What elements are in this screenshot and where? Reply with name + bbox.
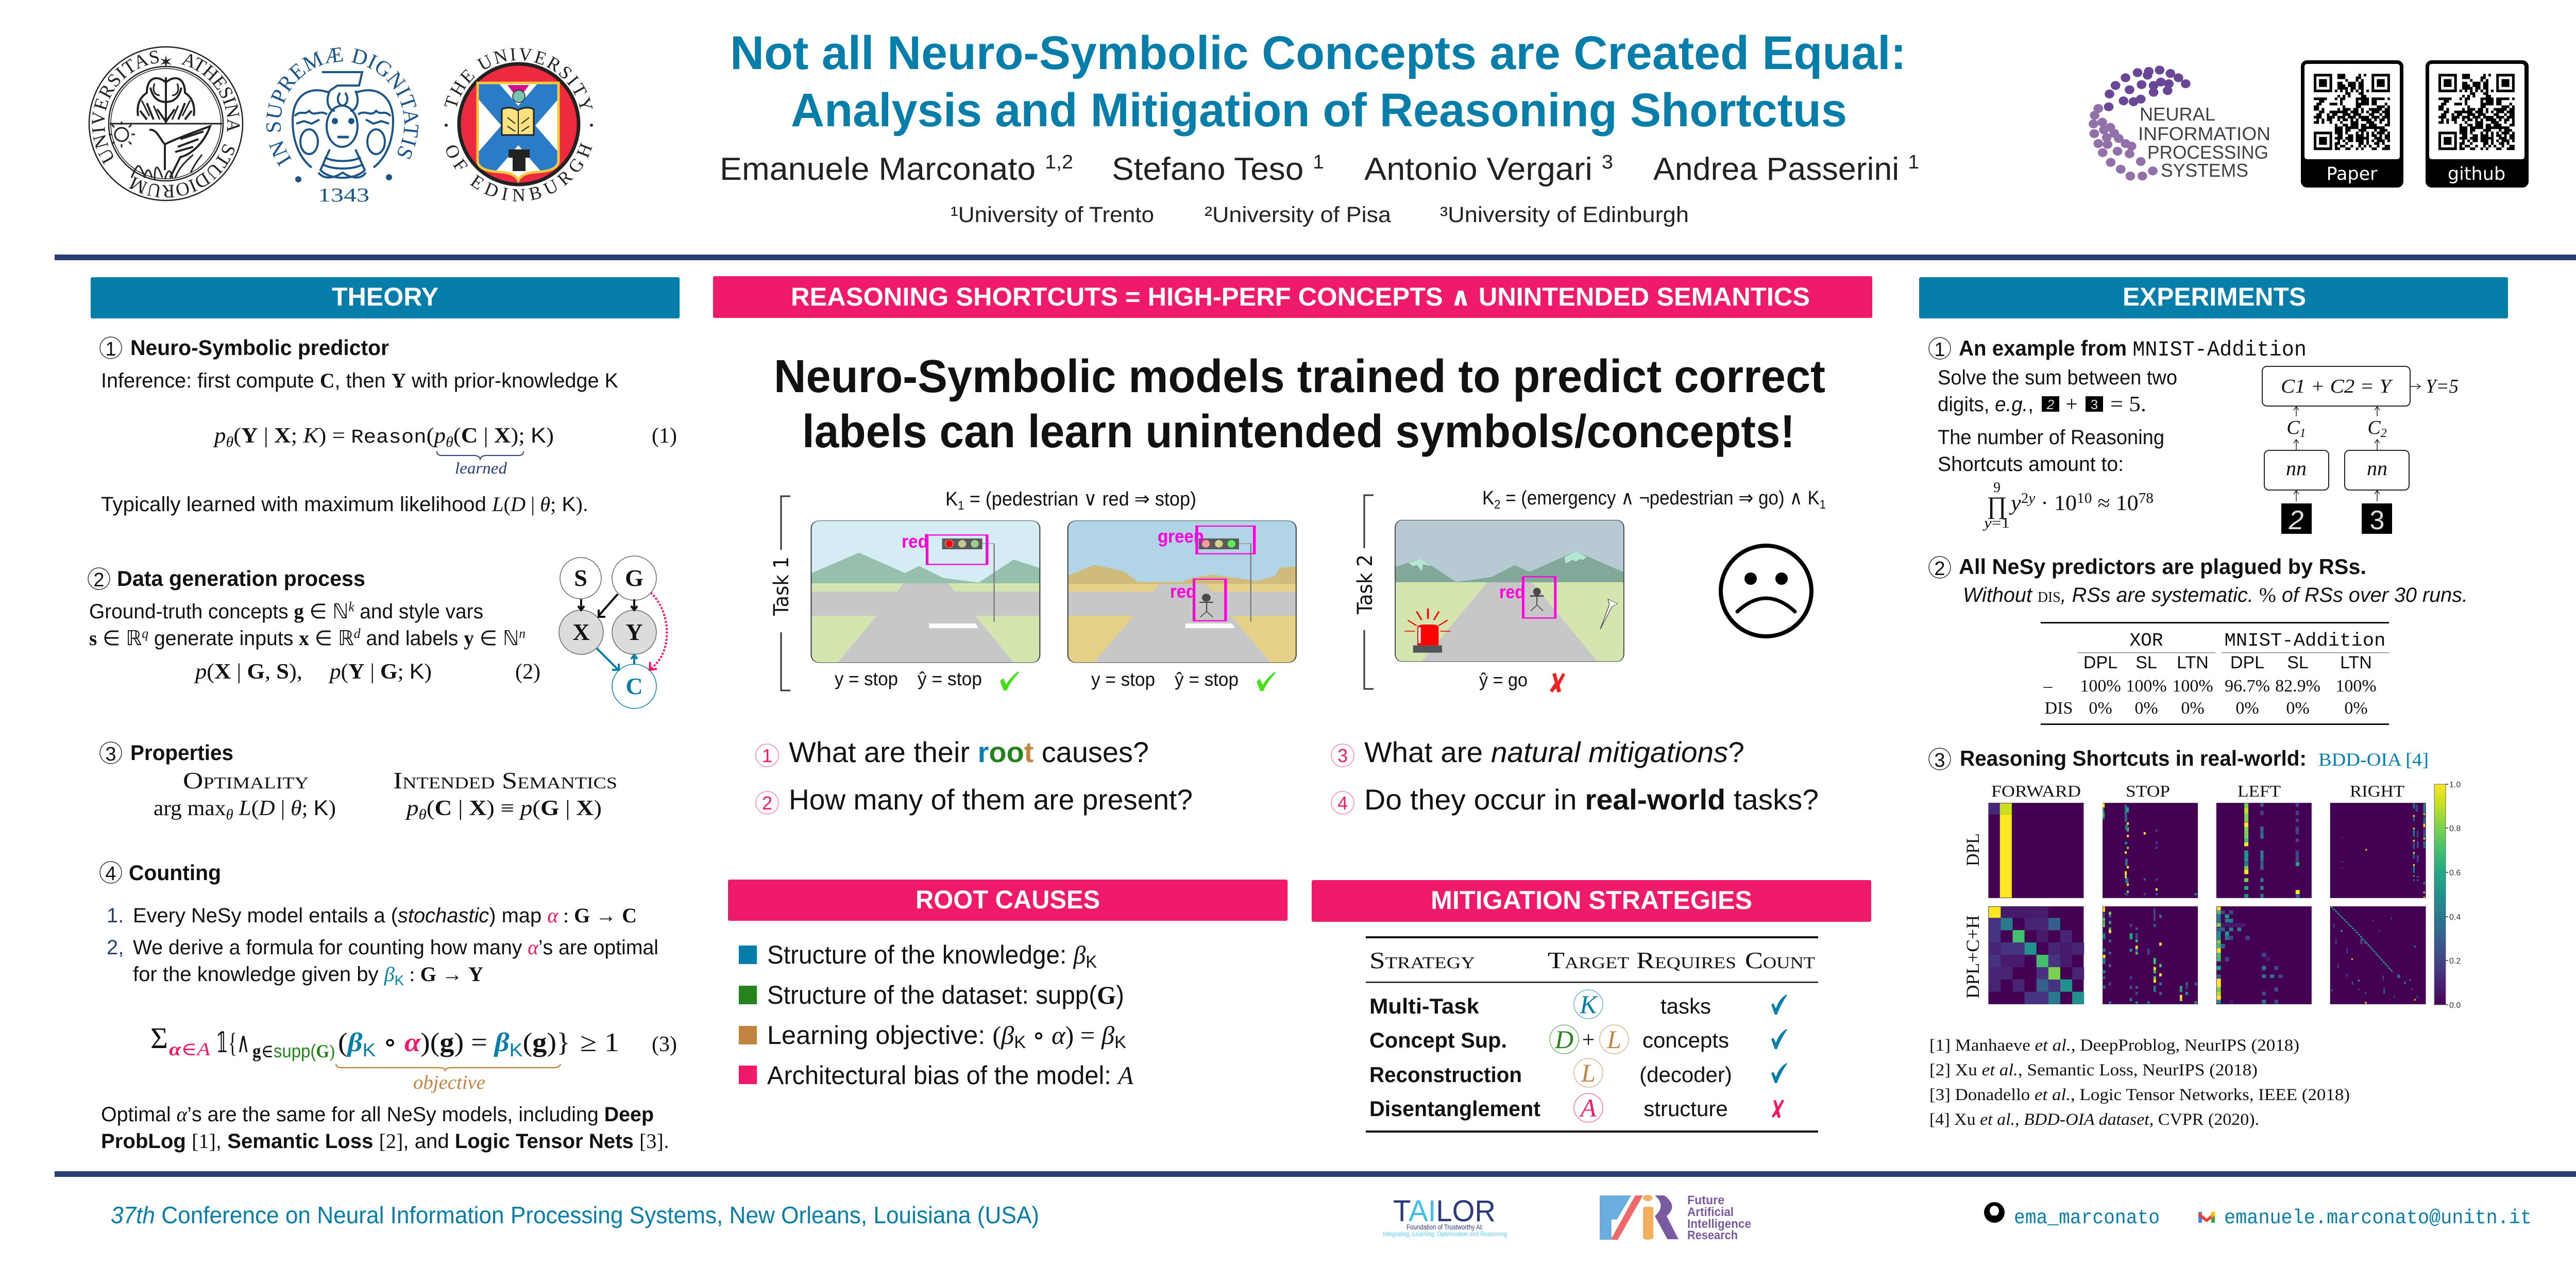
heading: experiments (1919, 277, 2508, 318)
item 3: properties: ( (427, 797, 435, 820)
icon: sad face (1721, 546, 1811, 636)
colorbar: 0.4 (2449, 913, 2461, 922)
logo: NeurIPS: NEURAL (2140, 104, 2215, 125)
item 2: data generation process: (2) (515, 660, 540, 684)
item 2: data generation process: k (348, 599, 354, 614)
table: strategies (1366, 936, 1818, 1133)
item 1: neuro-symbolic predictor: p (213, 424, 226, 448)
cause: objective (739, 1021, 1126, 1052)
table: strategies: K (1579, 990, 1598, 1019)
chart: heatmaps BDD-OIA: LEFT (2238, 782, 2281, 800)
item 1: MNIST example: 9 (1993, 480, 2001, 496)
table: RS percentages: 100% (2126, 677, 2167, 696)
item 3: properties: arg max (154, 797, 224, 820)
item 1: neuro-symbolic predictor: 1 (105, 339, 116, 360)
table: RS percentages: 96.7% (2225, 677, 2270, 696)
question 1: 1 (762, 745, 772, 766)
item 1: neuro-symbolic predictor: (1) (652, 424, 677, 448)
heatmap: DPL left (2216, 803, 2312, 898)
logo: NeurIPS (2089, 65, 2270, 181)
chart: heatmaps BDD-OIA: DPL (1962, 833, 1983, 866)
panel: mitigation strategies (1312, 880, 1871, 1133)
predictions task 1 (835, 668, 1276, 691)
heading: experiments: EXPERIMENTS (2123, 282, 2306, 311)
equation 3: ( (523, 1028, 532, 1057)
equation 3: α∈A (169, 1039, 211, 1059)
table: strategies: Multi-Task (1369, 994, 1480, 1018)
table: strategies: Reconstruction (1369, 1062, 1522, 1087)
logo: TAILOR (1383, 1194, 1507, 1238)
chart: MNIST-addition architecture: nn (2367, 457, 2387, 480)
colorbar: 0.0 (2449, 1001, 2461, 1010)
logo: University of Trento: STUDIORUM (129, 144, 235, 198)
logo: University of Edinburgh: OF EDINBURGH (446, 142, 592, 201)
item 4: counting: K (395, 972, 404, 988)
title: Analysis and Mitigation of Reasoning Shortctus (791, 84, 1847, 137)
heatmap: DPL stop (2103, 803, 2198, 898)
table: strategies: Target (1548, 947, 1630, 973)
heading: reasoning shortcuts (713, 276, 1872, 318)
cause: objective: α) = β (1052, 1021, 1114, 1050)
item 1: MNIST example: y (2009, 492, 2021, 515)
item 2: all NeSy predictors: 2 (1934, 558, 1945, 580)
item 1: neuro-symbolic predictor: θ (446, 434, 453, 450)
item 2: data generation process: Data generation process (117, 566, 365, 591)
logo: University of Edinburgh (444, 48, 593, 201)
logo: University of Trento: UNIVERSITAS (92, 50, 159, 165)
authors: 1 (1313, 151, 1324, 173)
knowledge K1: = (pedestrian ∨ red ⇒ stop) (964, 488, 1196, 510)
table: strategies: Requires (1636, 947, 1736, 973)
title: Not all Neuro-Symbolic Concepts are Created Equal: (730, 27, 1906, 79)
item 2: all NeSy predictors (1929, 554, 2468, 606)
table: RS percentages: 82.9% (2275, 677, 2320, 696)
item 2: all NeSy predictors: All NeSy predictors are plagued by RSs. (1959, 554, 2366, 579)
equation 3: (3) (652, 1033, 677, 1056)
cause: objective: Learning objective: (β (767, 1021, 1014, 1050)
QR code: Paper: Paper (2326, 164, 2378, 184)
authors: Antonio Vergari (1364, 151, 1583, 187)
chart: heatmaps BDD-OIA: RIGHT (2350, 782, 2404, 800)
item 2: data generation process: q (142, 626, 148, 641)
item 3: properties: Intended Semantics (393, 767, 617, 794)
table: RS percentages: DIS (2045, 699, 2073, 718)
references: [4] Xu et al., BDD-OIA dataset, CVPR (2020). (1929, 1110, 2259, 1129)
task 1 bracket and label (770, 496, 793, 690)
heatmap: DPL+C+H left (2216, 906, 2312, 1004)
predictions task 1: ŷ = stop (1175, 669, 1239, 690)
chart: graphical model: X (572, 619, 590, 645)
item 1: neuro-symbolic predictor: ( (233, 424, 241, 448)
item 1: neuro-symbolic predictor: θ (226, 434, 233, 450)
heading: theory: THEORY (332, 282, 438, 311)
authors: Emanuele Marconato (720, 151, 1023, 187)
table: strategies: + (1582, 1027, 1595, 1052)
equation 3 (150, 1021, 677, 1093)
item 1: MNIST example: 3 (2091, 397, 2098, 412)
main statement: Neuro-Symbolic models trained to predict correct (774, 351, 1825, 402)
item 3: properties: Properties (130, 740, 233, 765)
panel: reasoning shortcuts (111, 276, 2532, 1242)
question 1: What are their root causes? (789, 736, 1149, 768)
table: RS percentages: SL (2136, 653, 2157, 672)
item 1: MNIST example: 2y (2021, 491, 2035, 507)
label: red pedestrian: red (1170, 581, 1196, 602)
item 2: data generation process (88, 566, 540, 684)
label: red: red (902, 531, 928, 552)
table: strategies: tasks (1660, 994, 1711, 1018)
heatmap: DPL+C+H right (2330, 906, 2426, 1004)
logo: TAILOR: Foundation of Trustworthy AI: (1406, 1223, 1483, 1231)
logo: University of Trento: ✶ (159, 53, 173, 72)
closing text: optimal alpha: Optimal α’s are the same for all NeSy models, including Deep (101, 1103, 654, 1126)
table: RS percentages: LTN (2177, 653, 2209, 672)
chart: MNIST-addition architecture: nn (2286, 457, 2307, 480)
question 2: 2 (762, 792, 772, 814)
logo: TAILOR: Integrating, Learning, Optimisation and Reasoning (1383, 1230, 1507, 1238)
task 1 bracket and label: Task 1 (770, 556, 793, 616)
knowledge K1: K (945, 488, 958, 510)
chart: heatmaps BDD-OIA: STOP (2126, 782, 2170, 800)
panel: theory (88, 277, 680, 1153)
item 3: properties: θ (226, 807, 233, 823)
question 3: What are natural mitigations? (1364, 736, 1744, 768)
cause: objective: ∘ (1026, 1021, 1052, 1050)
table: RS percentages: DPL (2230, 653, 2264, 672)
chart: heatmaps BDD-OIA: DPL+C+H (1962, 915, 1983, 999)
item 1: MNIST example: · 10 (2035, 492, 2077, 515)
affiliations: ³University of Edinburgh (1440, 203, 1689, 227)
equation 3: ≥ 1 (580, 1028, 619, 1057)
QR code: Paper (2301, 60, 2403, 188)
table: strategies: concepts (1642, 1028, 1729, 1052)
title (730, 27, 1906, 137)
chart: graphical model: Y (625, 619, 643, 645)
logo: University of Edinburgh: THE UNIVERSITY (444, 48, 593, 109)
cause: objective: K (1014, 1033, 1026, 1052)
equation 3: g)} (532, 1028, 569, 1057)
item 1: neuro-symbolic predictor: Neuro-Symbolic predictor (130, 335, 389, 360)
table: strategies: Concept Sup. (1369, 1028, 1507, 1052)
cause: objective: K (1114, 1033, 1126, 1052)
table: RS percentages: DPL (2083, 653, 2117, 672)
cause: architecture: Architectural bias of the model: A (767, 1061, 1133, 1090)
table: strategies: Strategy (1369, 947, 1475, 973)
item 2: data generation process: p(Y | G; K) (328, 659, 432, 684)
panel: experiments (1919, 277, 2508, 1129)
item 1: MNIST example: 1 (1934, 339, 1945, 361)
icon: gmail (2198, 1212, 2215, 1223)
colorbar (2434, 781, 2461, 1010)
logo: FAIR: Artificial (1687, 1205, 1734, 1219)
heading: mitigation strategies (1312, 880, 1871, 922)
table: RS percentages: 100% (2172, 677, 2213, 696)
panel: root causes (728, 880, 1287, 1090)
affiliations: ¹University of Trento (951, 203, 1154, 227)
item 2: data generation process: generate inputs (148, 627, 299, 650)
equation 3: g∈supp(G) (252, 1040, 335, 1061)
table: RS percentages (2041, 622, 2389, 725)
item 2: data generation process: x ∈ ℝ (299, 627, 355, 650)
chart: graphical model: G (625, 565, 643, 591)
authors: 1,2 (1045, 151, 1073, 173)
item 1: MNIST example: An example from MNIST-Addition (1959, 336, 2307, 362)
table: RS percentages: 100% (2335, 677, 2377, 696)
item 3: reasoning shortcuts real world: 3 (1934, 750, 1945, 771)
chart: graphical model: C (625, 673, 643, 699)
logo: FAIR: Future (1687, 1193, 1724, 1207)
item 1: MNIST example: digits, e.g., (1938, 393, 2033, 416)
github handle: ema_marconato (2014, 1207, 2160, 1229)
table: strategies: D (1554, 1025, 1573, 1054)
closing text: optimal alpha (101, 1103, 669, 1153)
logo: FAIR: Intelligence (1687, 1217, 1751, 1231)
item 2: all NeSy predictors: Without dis, RSs are systematic. % of RSs over 30 runs. (1963, 583, 2468, 606)
table: strategies: L (1581, 1058, 1596, 1087)
chart: graphical model: S (574, 565, 587, 591)
item 4: counting: : (404, 963, 420, 986)
table: RS percentages: 0% (2181, 699, 2205, 718)
chart: MNIST-addition architecture: 1 (2300, 427, 2306, 440)
references: [3] Donadello et al., Logic Tensor Networks, IEEE (2018) (1929, 1086, 2350, 1104)
references: [2] Xu et al., Semantic Loss, NeurIPS (2018) (1929, 1061, 2258, 1079)
item 3: reasoning shortcuts real world: Reasoning Shortcuts in real-world: (1960, 746, 2307, 770)
table: RS percentages: 0% (2286, 699, 2310, 718)
item 4: counting (100, 861, 658, 988)
authors: 1 (1908, 151, 1919, 173)
item 1: MNIST example: 2 (2046, 397, 2055, 412)
chart: MNIST-addition architecture: C (2367, 417, 2381, 438)
chart: MNIST-addition architecture (2262, 366, 2459, 535)
logo: NeurIPS: PROCESSING (2147, 142, 2268, 163)
item 4: counting: for the knowledge given by β (133, 963, 395, 986)
table: strategies: structure (1643, 1097, 1728, 1121)
authors: Stefano Teso (1112, 151, 1298, 187)
table: RS percentages: 0% (2134, 699, 2158, 718)
affiliations (951, 203, 1689, 227)
item 1: MNIST example: 10 (2077, 491, 2092, 507)
heading: theory (91, 277, 680, 318)
chart: heatmaps BDD-OIA (1962, 781, 2461, 1010)
heatmap: DPL+C+H forward (1988, 906, 2084, 1004)
heading: root causes: ROOT CAUSES (916, 885, 1100, 914)
heatmap: DPL forward (1988, 803, 2083, 898)
QR code: github: github (2448, 164, 2505, 184)
item 1: MNIST example: ≈ 10 (2092, 492, 2139, 515)
item 3: properties (100, 740, 617, 823)
item 4: counting: G → Y (420, 963, 483, 986)
predictions task 1: y = stop (1091, 669, 1155, 690)
chart: MNIST-addition architecture: 3 (2370, 505, 2384, 535)
chart: MNIST-addition architecture: Y=5 (2426, 376, 2459, 397)
item 1: neuro-symbolic predictor (100, 335, 677, 516)
logo: NeurIPS: INFORMATION (2138, 123, 2270, 144)
item 4: counting: 4 (105, 863, 116, 885)
table: strategies: A (1579, 1093, 1597, 1122)
item 3: properties: (D | θ; K) (251, 796, 336, 820)
item 3: reasoning shortcuts real world: BDD-OIA [4] (2318, 749, 2429, 770)
knowledge K1: 1 (958, 499, 964, 513)
item 1: MNIST example (1929, 336, 2307, 531)
item 4: counting: 2, (107, 936, 124, 959)
cause: dataset: Structure of the dataset: supp(G) (767, 981, 1124, 1009)
colorbar: 0.6 (2449, 869, 2461, 878)
item 3: properties: 3 (105, 744, 116, 765)
item 3: reasoning shortcuts real world (1929, 746, 2429, 771)
item 1: MNIST example: = 5. (2110, 393, 2146, 416)
equation 3: K (510, 1039, 523, 1060)
equation 3: Σ (150, 1021, 168, 1055)
item 1: neuro-symbolic predictor: Y | X; K) = Reason(p (241, 424, 445, 449)
table: strategies: Count (1745, 947, 1816, 973)
prediction task 2 (1479, 669, 1565, 693)
item 1: neuro-symbolic predictor: learned (455, 459, 507, 477)
knowledge K2: 1 (1820, 498, 1826, 512)
question 3: 3 (1337, 745, 1348, 766)
chart: MNIST-addition architecture: C1 + C2 = Y (2281, 376, 2393, 397)
item 2: data generation process: and style vars (354, 600, 483, 623)
questions (756, 736, 1819, 816)
label: red task 2: red (1499, 581, 1525, 602)
heading: mitigation strategies: MITIGATION STRATEGIES (1431, 886, 1752, 915)
item 4: counting: Counting (129, 861, 221, 885)
heading: root causes (728, 880, 1287, 921)
logo: FAIR: Research (1687, 1228, 1738, 1242)
colorbar: 0.2 (2449, 957, 2461, 966)
equation 3: ∘ (376, 1028, 404, 1057)
question 4: Do they occur in real-world tasks? (1364, 783, 1819, 816)
item 1: MNIST example: The number of Reasoning (1938, 426, 2164, 449)
item 4: counting: Every NeSy model entails a (stochastic) map α : G → C (133, 904, 637, 927)
item 2: data generation process: d (354, 626, 361, 641)
item 4: counting: We derive a formula for counting how many α’s are optimal (133, 936, 658, 959)
knowledge K2: 2 (1494, 498, 1501, 512)
item 3: properties: L (233, 797, 251, 820)
predictions task 1: y = stop (835, 668, 898, 689)
colorbar: 1.0 (2449, 781, 2461, 789)
logo: University of Pisa: 1343 (318, 184, 369, 206)
scene: emergency (1395, 520, 1624, 662)
item 1: neuro-symbolic predictor: C | X); K) (461, 423, 553, 448)
prediction task 2: ŷ = go (1479, 669, 1528, 690)
references: [1] Manhaeve et al., DeepProblog, NeurIPS (2018) (1929, 1036, 2299, 1055)
table: strategies: Disentanglement (1369, 1097, 1540, 1121)
item 1: MNIST example: Solve the sum between two (1938, 366, 2177, 389)
item 3: properties: C | X) ≡ p(G | X) (435, 797, 601, 820)
equation 3: objective (413, 1072, 485, 1093)
item 4: counting: 1. (107, 904, 124, 927)
authors (720, 151, 1919, 187)
affiliations: ²University of Pisa (1205, 203, 1391, 227)
table: RS percentages: MNIST-Addition (2225, 630, 2385, 651)
main statement: labels can learn unintended symbols/concepts! (802, 406, 1795, 458)
cause: knowledge: K (1086, 952, 1097, 972)
logo: NeurIPS: SYSTEMS (2161, 160, 2248, 181)
chart: MNIST-addition architecture: 2 (2381, 427, 2387, 440)
table: RS percentages: SL (2287, 653, 2309, 672)
closing text: optimal alpha: ProbLog [1], Semantic Loss [2], and Logic Tensor Nets [3]. (101, 1129, 669, 1153)
equation 3: α)(g) = β (404, 1028, 509, 1057)
cause: knowledge: Structure of the knowledge: β (767, 940, 1086, 969)
item 1: neuro-symbolic predictor: Typically learned with maximum likelihood L(D | θ; K). (101, 493, 588, 516)
question 2: How many of them are present? (789, 783, 1193, 816)
table: RS percentages: 0% (2344, 699, 2368, 718)
table: RS percentages: 100% (2080, 677, 2121, 696)
chart: heatmaps BDD-OIA: FORWARD (1991, 782, 2081, 800)
authors: 3 (1602, 151, 1613, 173)
table: RS percentages: LTN (2340, 653, 2372, 672)
chart: graphical model (559, 556, 667, 709)
logo: University of Trento: ATHESINA (181, 54, 240, 132)
chart: MNIST-addition architecture: 2 (2289, 505, 2304, 535)
logo: University of Trento (89, 46, 243, 201)
heatmap: DPL right (2330, 803, 2426, 898)
item 2: data generation process: 2 (93, 569, 105, 591)
logo: TAILOR: TAILOR (1393, 1194, 1496, 1228)
email: emanuele.marconato@unitn.it (2224, 1207, 2532, 1229)
item 1: MNIST example: ∏ (1987, 492, 2007, 519)
equation 3: K (362, 1039, 376, 1060)
item 2: data generation process: n (519, 626, 526, 641)
table: strategies: L (1606, 1025, 1621, 1054)
heading: reasoning shortcuts: REASONING SHORTCUTS = HIGH-PERF CONCEPTS ∧ UNINTENDED SEMANTICS (791, 282, 1810, 311)
item 1: neuro-symbolic predictor: ( (453, 424, 461, 448)
task 2 bracket and label (1353, 495, 1377, 689)
logo: FAIR (1600, 1193, 1751, 1242)
label: green: green (1158, 526, 1204, 547)
predictions task 1: ŷ = stop (918, 668, 982, 689)
knowledge K2: = (emergency ∧ ¬pedestrian ⇒ go) ∧ K (1501, 487, 1820, 509)
authors: Andrea Passerini (1653, 151, 1896, 187)
item 3: properties: θ (418, 807, 427, 823)
item 2: data generation process: Ground-truth concepts g ∈ ℕ (89, 600, 350, 623)
item 2: data generation process: s ∈ ℝ (89, 627, 143, 650)
main statement (774, 351, 1825, 458)
icon: github (1984, 1202, 2005, 1223)
colorbar: 0.8 (2449, 824, 2461, 833)
item 2: data generation process: y ∈ ℕ (464, 627, 520, 650)
item 1: MNIST example: y=1 (1982, 515, 2010, 531)
QR code: github (2426, 60, 2529, 188)
item 3: properties: Optimality (183, 767, 309, 794)
task 2 bracket and label: Task 2 (1353, 554, 1377, 615)
knowledge K2: K (1482, 487, 1495, 509)
table: RS percentages: 0% (2235, 699, 2259, 718)
question 4: 4 (1337, 792, 1348, 814)
item 3: properties: p (405, 797, 418, 820)
table: RS percentages: – (2043, 677, 2053, 696)
equation 3: (β (338, 1028, 361, 1057)
equation 3: 𝟙{∧ (216, 1027, 250, 1058)
heatmap: DPL+C+H stop (2103, 906, 2198, 1004)
item 1: neuro-symbolic predictor: Inference: first compute C, then Y with prior-knowledge K (101, 369, 618, 392)
item 1: MNIST example: Shortcuts amount to: (1938, 453, 2124, 476)
table: RS percentages: XOR (2130, 630, 2163, 651)
scene: red light (811, 521, 1040, 663)
item 1: MNIST example: + (2065, 393, 2078, 416)
references (1929, 1036, 2350, 1129)
table: strategies: (decoder) (1639, 1062, 1732, 1087)
logo: University of Pisa: IN SUPREMÆ DIGNITATIS (266, 47, 418, 167)
footer: conference: 37th Conference on Neural Information Processing Systems, New Orleans, Louisiana (USA) (111, 1202, 1039, 1228)
table: RS percentages: 0% (2089, 699, 2112, 718)
item 1: MNIST example: 78 (2139, 491, 2154, 507)
chart: MNIST-addition architecture: C (2286, 417, 2300, 438)
item 2: data generation process: and labels (361, 627, 464, 650)
scene: pedestrian (1068, 521, 1296, 663)
item 2: data generation process: p(X | G, S), (194, 660, 302, 684)
